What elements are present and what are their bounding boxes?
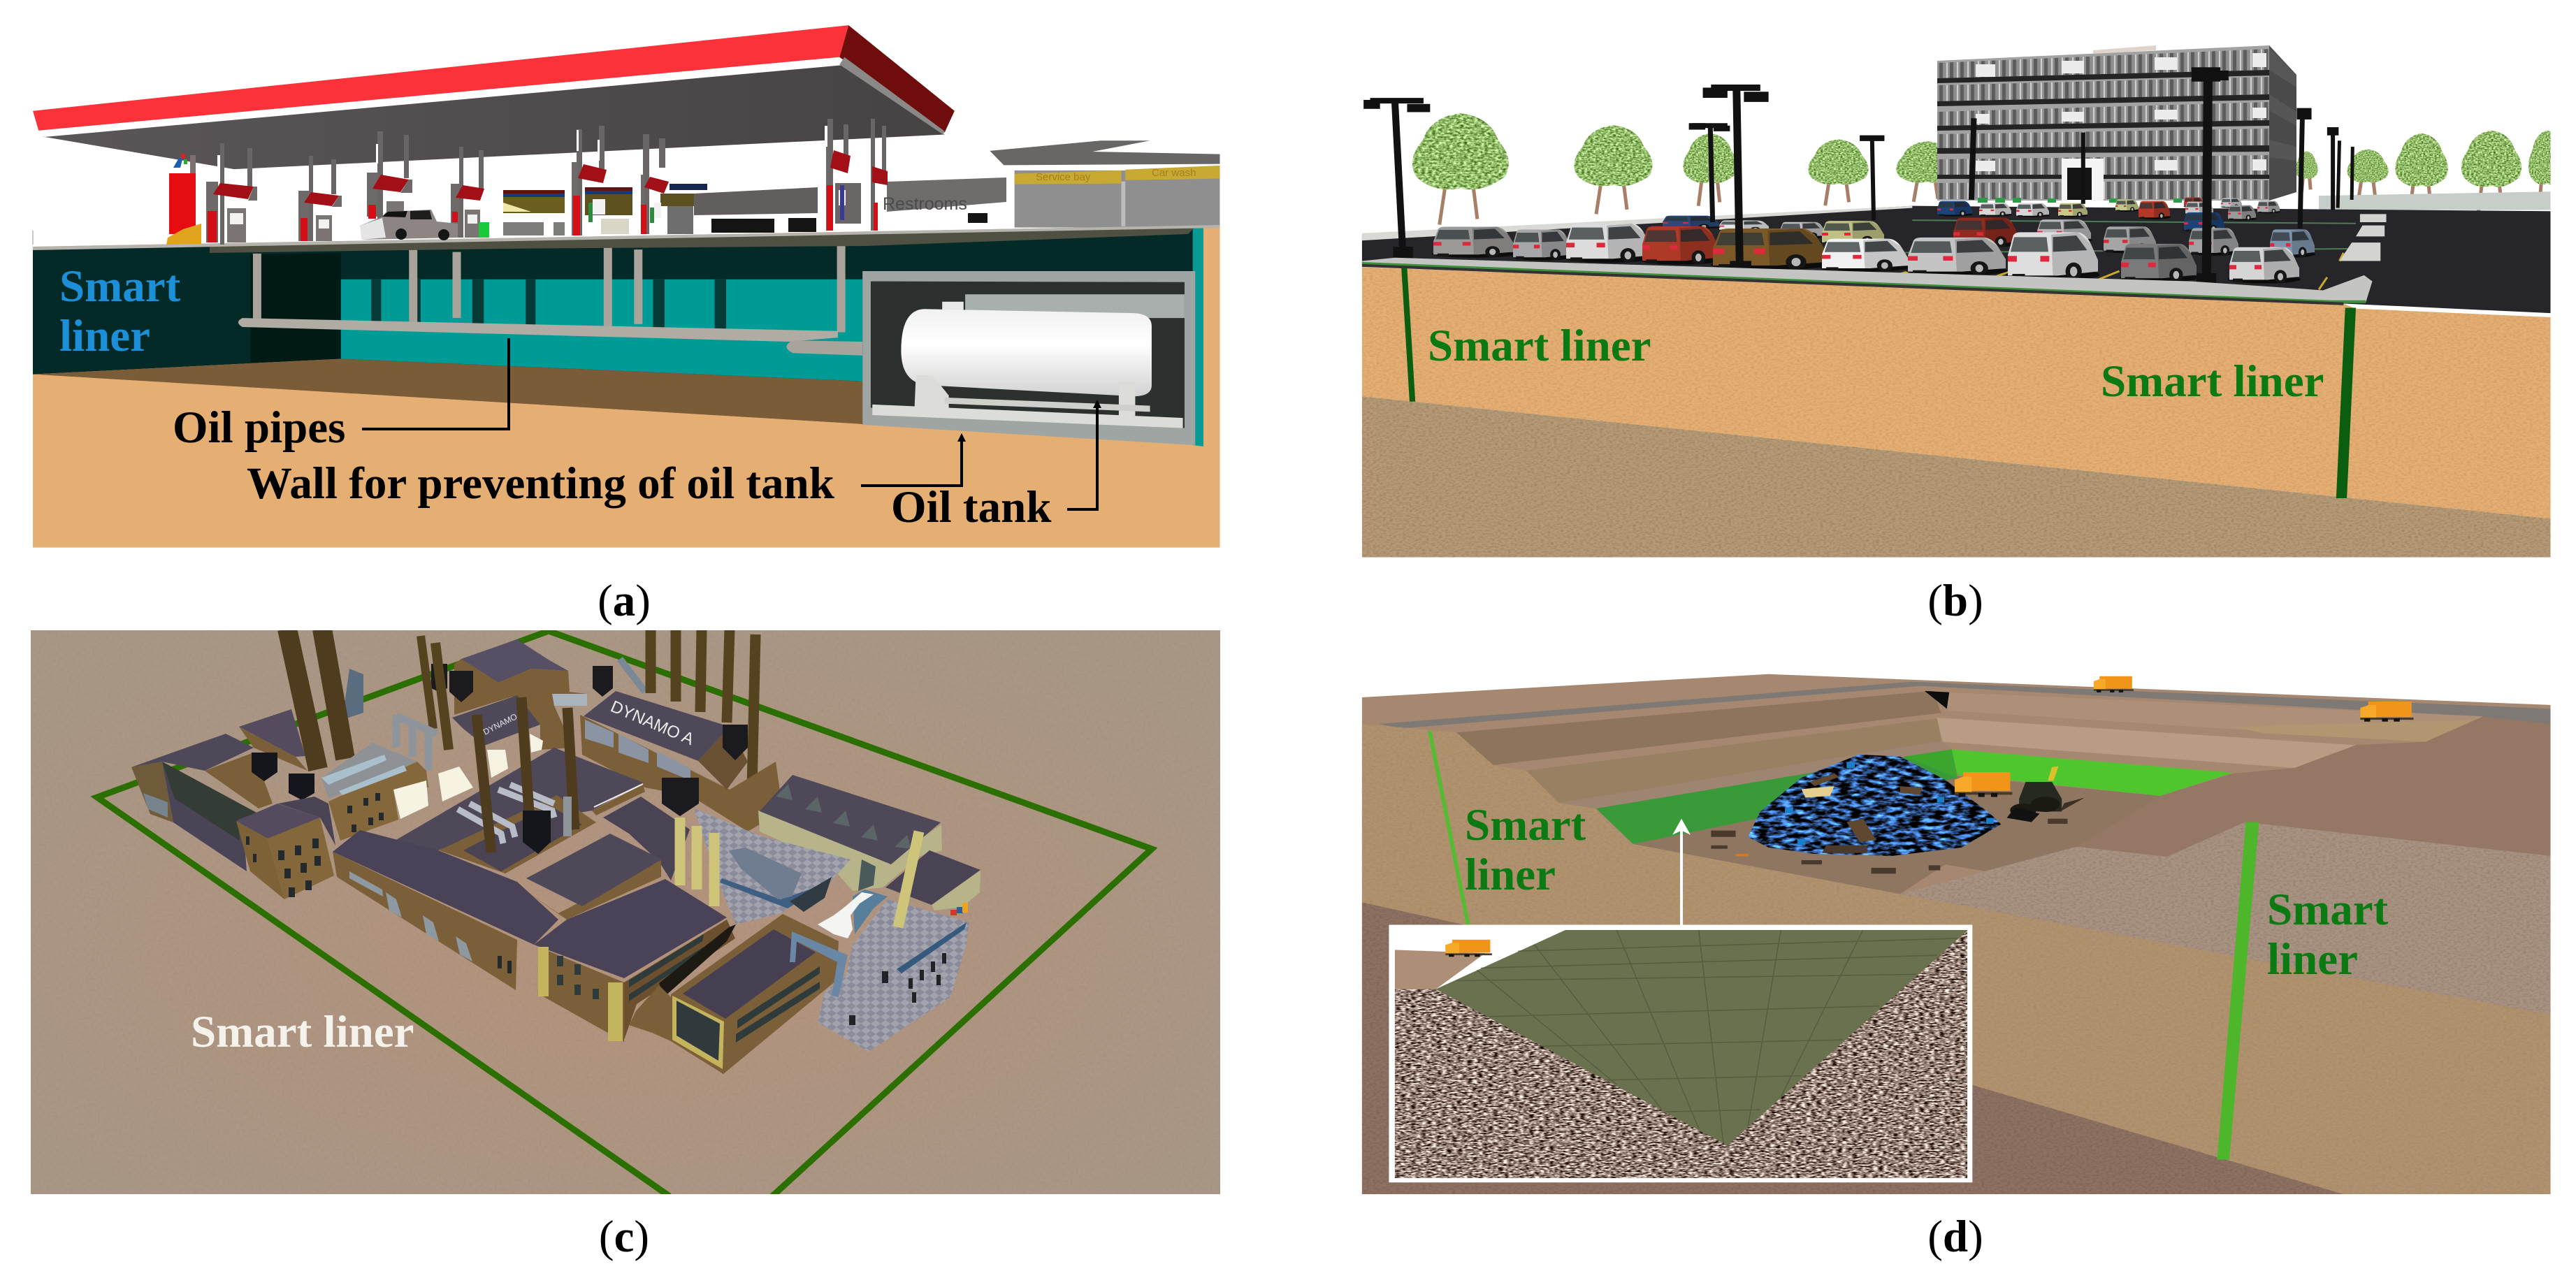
- central chimneys: [477, 697, 574, 852]
- rear chimneys: [620, 629, 755, 788]
- label: smart liner right: liner: [2267, 934, 2358, 985]
- office building: [1937, 45, 2296, 203]
- callout: oil pipes: Oil pipes: [173, 402, 345, 453]
- label: smart liner: liner: [59, 311, 150, 361]
- black water towers rear: [431, 664, 748, 816]
- lamp posts: [1370, 75, 2352, 289]
- fuel dispensers: [227, 185, 846, 242]
- label: smart liner: Smart liner: [191, 1007, 414, 1057]
- canopy grey trim: [839, 57, 945, 135]
- left liner: [1401, 268, 1415, 402]
- pit floor: [1633, 776, 2160, 894]
- inset gravel texture: [1395, 989, 1967, 1178]
- scattered debris: [1711, 819, 2067, 873]
- soil block: [33, 225, 1220, 548]
- machinery yard: [694, 808, 851, 924]
- lot stripes: [1896, 253, 2343, 289]
- teal back wall: [341, 279, 862, 382]
- caption b: (b): [1927, 576, 1983, 626]
- gas station scene: [33, 25, 1220, 548]
- green lane markings: [1888, 220, 2356, 253]
- soil grain: [1362, 267, 2551, 518]
- ground: [31, 630, 1220, 1194]
- blue tower left: [342, 669, 363, 720]
- slim chimneys rear: [421, 636, 449, 750]
- teal liner edge: [1193, 226, 1203, 446]
- lamp heads and bases: [1363, 67, 2338, 289]
- excavation floor: [33, 358, 862, 424]
- callout: oil tank: [891, 400, 1101, 532]
- back wall dark columns: [371, 279, 726, 331]
- canopy red fascia: [33, 25, 848, 131]
- left cut slope: [1362, 724, 2551, 1194]
- callout: wall for preventing of oil tank: Wall for preventing of oil tank: [247, 458, 835, 509]
- right sloped roof: [592, 784, 690, 880]
- dynamo small roof: [452, 695, 540, 746]
- red pump column panels: [208, 185, 878, 242]
- left pit ledge: [1559, 741, 1953, 808]
- deep ground grain: [1362, 903, 2343, 1194]
- underground dark wall: [33, 228, 1199, 444]
- right bench: [1945, 716, 2551, 877]
- sign text: restrooms: Restrooms: [883, 194, 967, 214]
- central big roof: [386, 748, 643, 850]
- top road: [1378, 682, 2551, 728]
- waste heap: [1748, 755, 2001, 856]
- dormer block: [758, 775, 942, 891]
- inset gravel: [1395, 930, 1967, 1178]
- right liner: [2336, 308, 2356, 498]
- long building: [333, 830, 558, 990]
- right garbage truck: [2360, 702, 2414, 722]
- courtyard frame: [439, 795, 596, 873]
- skylight block: [321, 743, 428, 841]
- stone block: [818, 832, 969, 1052]
- sign text: dynamo: DYNAMO: [482, 711, 519, 737]
- front dark building: [671, 914, 839, 1074]
- label: smart liner right: Smart: [2267, 885, 2389, 935]
- soil top shadow: [1362, 266, 2343, 304]
- label: smart liner right: [2267, 885, 2389, 985]
- landfill scene: [1362, 674, 2551, 1194]
- ground slab line: [33, 225, 1220, 250]
- top garbage truck: [2094, 676, 2134, 692]
- parking islands: [2340, 214, 2387, 261]
- label: smart liner right: Smart liner: [2101, 356, 2324, 407]
- caption a: (a): [598, 576, 651, 626]
- inset sheet grid: [1456, 930, 1958, 1143]
- label: smart liner left: Smart: [1465, 800, 1586, 850]
- base terrain: [1362, 674, 2551, 1194]
- middle row cars: [1661, 216, 2315, 257]
- small front gable: [517, 834, 662, 920]
- white arrow: [1672, 819, 1691, 926]
- black towers left: [252, 753, 314, 800]
- callout: oil pipes: [173, 338, 509, 453]
- panel c: factory with liner perimeter: [31, 629, 1220, 1262]
- label: smart liner left: [1465, 800, 1586, 900]
- lavender pipes: [458, 785, 554, 843]
- panel d: landfill with liner: [1362, 674, 2551, 1262]
- side wall shade: [250, 253, 341, 363]
- column white highlights: [217, 126, 827, 180]
- base soil grain: [1362, 396, 2551, 558]
- inset truck: [1445, 940, 1492, 957]
- inset frame: [1389, 926, 1972, 1182]
- caption c: (c): [599, 1212, 649, 1262]
- green liner left wall: [1596, 749, 1958, 844]
- inset frame border: [1391, 927, 1971, 1181]
- tall chimneys: [287, 629, 345, 769]
- pump canopy signs: [213, 150, 888, 206]
- far fence: [2319, 191, 2551, 210]
- panel a: gas station cross-section: [33, 25, 1220, 626]
- yellow chimneys: [680, 818, 714, 906]
- shop left: [503, 190, 565, 235]
- back row cars: [1718, 198, 2280, 232]
- corner shadow: [1925, 691, 1949, 709]
- inset far bank: [1395, 950, 1485, 989]
- courtyard roof: [463, 806, 582, 871]
- canopy underside: [43, 64, 945, 169]
- right small building: [885, 850, 981, 910]
- loader: [2006, 767, 2085, 822]
- right upper terrace: [1948, 692, 2483, 742]
- right top ramp: [2233, 720, 2479, 742]
- grey column and tower: [523, 797, 567, 854]
- factory scene: [31, 629, 1220, 1196]
- sign text: dynamo a: DYNAMO A: [608, 697, 697, 749]
- sidewalk liner edge: [1362, 263, 2366, 302]
- trees: [1412, 113, 2566, 225]
- pipe bridge: [552, 694, 587, 706]
- oil pipes: [238, 245, 862, 356]
- slab underside band: [210, 227, 1195, 253]
- sign text: service bay: Service bay: [1036, 171, 1091, 183]
- left upper terrace: [1456, 691, 1941, 765]
- callout: oil tank: Oil tank: [891, 482, 1052, 532]
- gravel band: [1900, 822, 2551, 1015]
- dark gap and brown link: [629, 924, 736, 1041]
- forecourt: pumps, shops and vehicles: [33, 119, 1220, 253]
- right middle terrace: [1937, 718, 2356, 768]
- green liner right wall: [1952, 749, 2233, 796]
- caption d: (d): [1927, 1212, 1983, 1262]
- inset scene: [1395, 930, 1968, 1178]
- right liner: [2217, 822, 2259, 1159]
- front row cars: [1432, 224, 2301, 284]
- label: smart liner: [59, 261, 181, 361]
- canopy white fascia: [38, 57, 841, 137]
- shop centre: [585, 184, 707, 234]
- deep ground: [1362, 903, 2343, 1194]
- garbage truck in pit: [1955, 772, 2012, 797]
- canopy columns: [220, 119, 886, 245]
- colourful bits: [950, 903, 968, 915]
- ground grain: [31, 630, 1220, 1194]
- asphalt lot: [1362, 206, 2551, 313]
- base soil: [1362, 396, 2551, 558]
- inset liner sheet: [1436, 930, 1968, 1146]
- middle block: [512, 680, 587, 750]
- canopy side fascia: [839, 25, 955, 133]
- white horizon kerb: [1362, 206, 1912, 240]
- pickup truck: [360, 210, 458, 240]
- left middle terrace: [1526, 718, 1941, 803]
- inset gravel upper right: [1728, 930, 1967, 1178]
- oil tank: [901, 302, 1152, 416]
- left cut grain: [1362, 724, 2551, 1194]
- blue pipe and white steam: [790, 889, 888, 997]
- soil block: [1362, 267, 2551, 518]
- label: smart liner left: Smart liner: [1428, 321, 1651, 371]
- left long wing: [131, 734, 256, 871]
- label: smart liner: Smart: [59, 261, 181, 312]
- left liner: [1428, 731, 1470, 926]
- pump island backs: [206, 147, 829, 242]
- dynamo a hall: [580, 691, 783, 832]
- rear domed hall: [454, 639, 570, 715]
- green liner perimeter: [97, 631, 1152, 1196]
- green liner corner: [1904, 749, 1958, 778]
- front gabled building: [534, 879, 735, 1042]
- oil tank bunker wall: [862, 271, 1195, 445]
- label: smart liner left: liner: [1465, 850, 1556, 900]
- sign text: car wash: Car wash: [1152, 167, 1196, 179]
- parked cars: [1432, 198, 2315, 284]
- price sign totem: [166, 154, 201, 245]
- sidewalk: [1362, 258, 2373, 304]
- callout: wall for preventing of oil tank: [247, 433, 966, 509]
- service bay building: [990, 140, 1220, 228]
- left rear courtyard and gable: [205, 709, 307, 808]
- parking lot scene: [1362, 45, 2566, 558]
- corner building: [236, 797, 335, 899]
- row of small posts: [32, 231, 34, 245]
- panel b: parking lot with vertical liner: [1362, 45, 2566, 626]
- white silos: [393, 734, 543, 819]
- gravel band grain: [1900, 822, 2551, 1015]
- restroom blocks: [694, 177, 1006, 233]
- grey pipes rear: [396, 715, 437, 771]
